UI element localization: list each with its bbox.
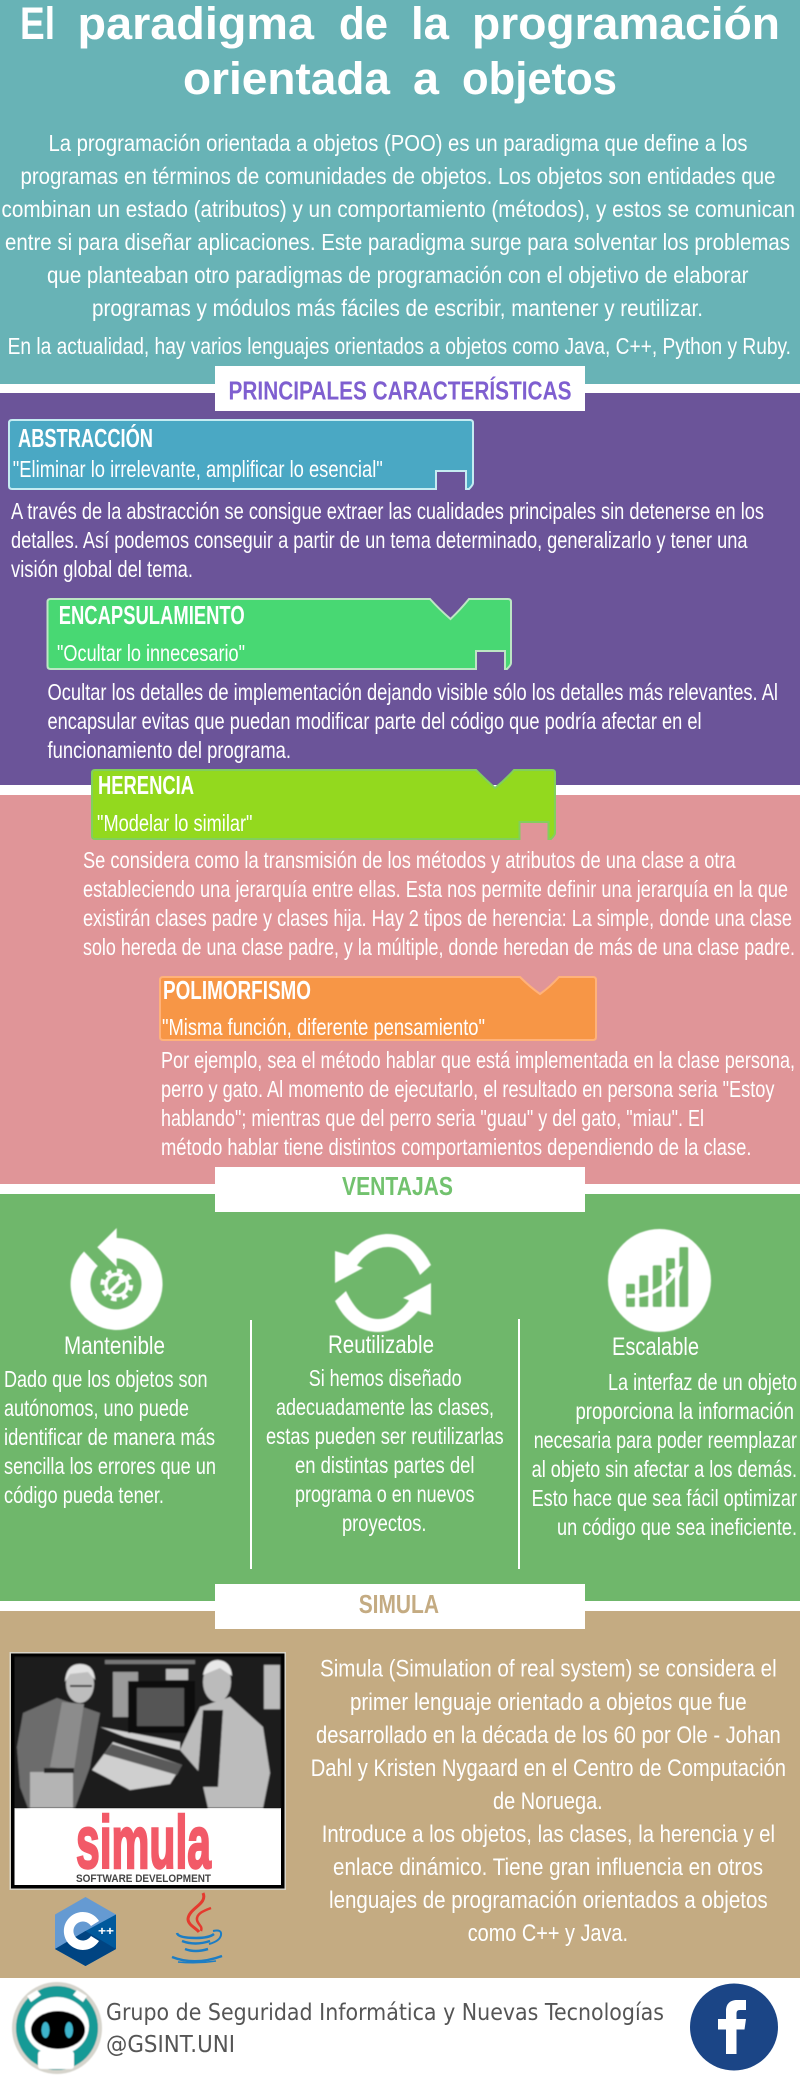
image: simula founders photo and logo [10, 1652, 286, 1890]
text: mantenible: autónomos, uno puede [4, 1395, 189, 1421]
icon: java logo [172, 1893, 222, 1963]
block: polimorfismo: POLIMORFISMO [163, 975, 311, 1005]
block: encapsulamiento: ENCAPSULAMIENTO [59, 600, 245, 630]
text: herencia [83, 847, 795, 960]
block: abstraccion [9, 420, 473, 489]
text: mantenible [4, 1366, 216, 1508]
section heading: principales caracteristicas: PRINCIPALES CARACTERÍSTICAS [228, 376, 572, 406]
text: simula: primer lenguaje orientado a objetos que fue [350, 1689, 747, 1716]
text: group name and handle: Grupo de Seguridad Informática y Nuevas Tecnologías [106, 2000, 664, 2026]
photo: two men beside a computer [14, 1657, 281, 1808]
text: reutilizable [266, 1365, 504, 1536]
intro text [2, 130, 795, 359]
heading: escalable: Escalable [612, 1333, 699, 1361]
text: mantenible: identificar de manera más [4, 1424, 215, 1450]
text: abstraccion: visión global del tema. [11, 556, 193, 582]
text: simula: de Noruega. [493, 1788, 603, 1815]
text: reutilizable: programa o en nuevos [295, 1481, 474, 1507]
heading: reutilizable: Reutilizable [328, 1331, 434, 1359]
footer [12, 1982, 778, 2074]
icon: robot logo [12, 1982, 102, 2074]
section heading: ventajas [215, 1167, 585, 1212]
text: escalable [532, 1369, 797, 1540]
text: reutilizable: Si hemos diseñado [309, 1365, 462, 1391]
text: reutilizable: proyectos. [342, 1510, 426, 1536]
title: objetos [462, 53, 617, 104]
block: encapsulamiento [48, 599, 511, 669]
section heading: simula: SIMULA [359, 1589, 439, 1619]
logo: simula [76, 1801, 211, 1885]
panel: herencia y polimorfismo [0, 770, 800, 1184]
text: polimorfismo [161, 1047, 795, 1160]
icon: facebook [690, 1984, 778, 2070]
panel: ventajas [0, 1167, 800, 1601]
text: group name and handle: @GSINT.UNI [106, 2032, 235, 2058]
text: mantenible: Dado que los objetos son [4, 1366, 208, 1392]
icon: c++ logo [55, 1897, 116, 1966]
text: encapsulamiento [48, 679, 778, 763]
text: abstraccion [11, 498, 764, 582]
text: encapsulamiento: funcionamiento del programa. [48, 737, 291, 763]
block: abstraccion: "Eliminar lo irrelevante, amplificar lo esencial" [13, 456, 383, 482]
text: reutilizable: adecuadamente las clases, [276, 1394, 494, 1420]
title: orientada [183, 53, 391, 104]
title [20, 0, 780, 104]
column: escalable [532, 1229, 797, 1540]
title: a [413, 53, 440, 104]
panel: introduction [0, 0, 800, 384]
text: reutilizable: estas pueden ser reutilizarlas [266, 1423, 504, 1449]
block: polimorfismo [160, 975, 596, 1040]
text: simula: como C++ y Java. [468, 1920, 628, 1947]
section heading: ventajas: VENTAJAS [342, 1171, 453, 1201]
column: reutilizable [266, 1234, 504, 1536]
block: abstraccion: ABSTRACCIÓN [18, 423, 153, 453]
panel: principales caracteristicas [0, 366, 800, 785]
panel: simula [0, 1584, 800, 1978]
section heading: principales caracteristicas [215, 366, 585, 411]
logo: simula: simula [76, 1801, 211, 1884]
icon: recycle arrows [335, 1234, 431, 1332]
text: mantenible: código pueda tener. [4, 1482, 164, 1508]
block: polimorfismo: "Misma función, diferente pensamiento" [162, 1014, 485, 1040]
block: herencia: HERENCIA [98, 770, 194, 800]
text: simula [311, 1656, 786, 1947]
column: mantenible [4, 1228, 216, 1508]
text: mantenible: sencilla los errores que un [4, 1453, 216, 1479]
text: group name and handle [106, 2000, 664, 2058]
block: encapsulamiento: "Ocultar lo innecesario" [57, 640, 245, 666]
icon: c++ logo: ++ [98, 1924, 114, 1938]
block: herencia [92, 770, 555, 839]
intro text: programas y módulos más fáciles de escribir, mantener y reutilizar. [92, 295, 703, 321]
icon: growth chart [608, 1229, 711, 1332]
heading: mantenible: Mantenible [64, 1332, 165, 1360]
section heading: simula [215, 1584, 585, 1629]
block: herencia: "Modelar lo similar" [97, 810, 252, 836]
logo: simula: SOFTWARE DEVELOPMENT [76, 1873, 211, 1885]
icon: maintenance arrow and gear [71, 1228, 163, 1330]
text: reutilizable: en distintas partes del [295, 1452, 474, 1478]
